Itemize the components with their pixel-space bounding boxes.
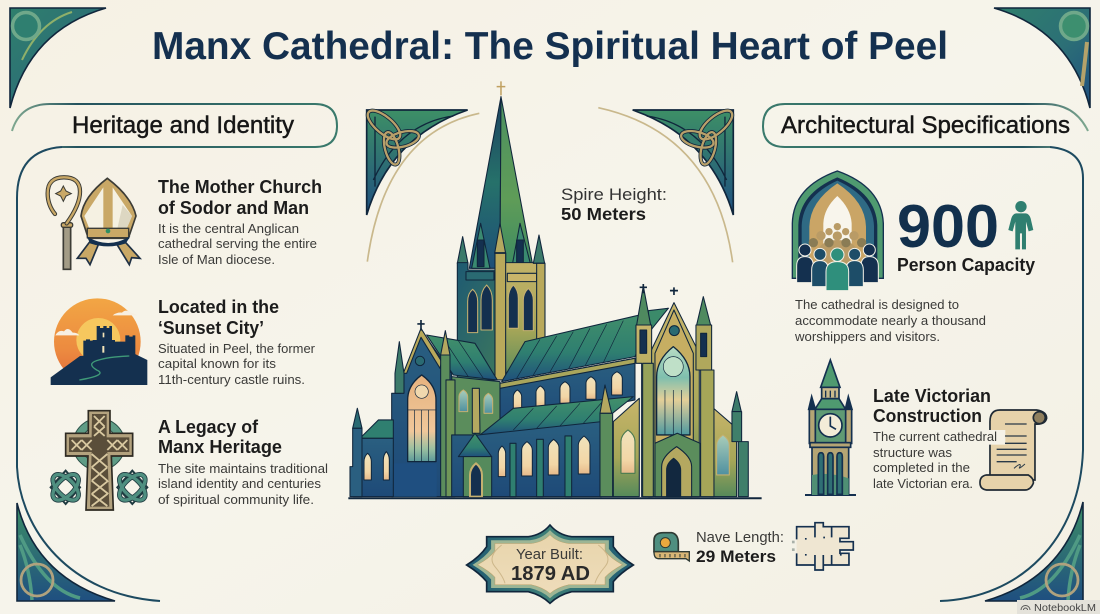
icon: floor plan: [792, 523, 853, 570]
icon: crozier and mitre: [48, 177, 140, 269]
text block: capacity description: [794, 298, 986, 344]
badge: year built: 1879 AD: [511, 563, 590, 585]
arc: right frame: [598, 108, 733, 262]
icon: person: [1008, 201, 1033, 249]
cathedral frame ornaments: [363, 106, 737, 262]
corner ornament: bottom right: [985, 502, 1083, 601]
text block: mother church: Isle of Man diocese.: [158, 253, 275, 267]
text block: mother church: It is the central Anglican: [158, 222, 299, 236]
text block: victorian construction: Construction: [873, 406, 982, 426]
icon: sunset castle: [51, 298, 147, 385]
text block: manx heritage: The site maintains traditional: [158, 462, 328, 476]
text block: capacity description: worshippers and visitors.: [794, 330, 940, 344]
watermark: NotebookLM: NotebookLM: [1034, 602, 1096, 614]
statistic: 900 capacity: Person Capacity: [897, 255, 1035, 275]
panel: architectural specifications: [763, 104, 1088, 601]
text block: manx heritage: A Legacy of: [158, 417, 259, 437]
left transept: [392, 320, 500, 497]
text block: manx heritage: Manx Heritage: [158, 437, 282, 457]
icon: scroll document: [980, 410, 1047, 490]
text block: sunset city: Situated in Peel, the former: [158, 342, 315, 356]
icon: arch with congregation: [792, 171, 883, 291]
text block: manx heritage: island identity and centuries: [158, 477, 321, 491]
badge: year built: Year Built:: [516, 546, 583, 563]
nave roof: [502, 308, 668, 382]
corner ornament: top left: [10, 8, 106, 108]
corner ornament: bottom left: [17, 503, 115, 601]
text block: sunset city: ‘Sunset City’: [158, 318, 264, 338]
icon: clock tower: [805, 360, 856, 495]
badge: year built: [467, 525, 633, 603]
far left chapel: [350, 408, 393, 497]
text block: sunset city: [158, 297, 315, 387]
text block: sunset city: 11th-century castle ruins.: [158, 373, 305, 387]
text block: mother church: of Sodor and Man: [158, 198, 309, 218]
text block: manx heritage: of spiritual community life.: [158, 493, 314, 507]
text block: victorian construction: [873, 386, 997, 491]
label: nave length: Nave Length:: [696, 529, 784, 546]
statistic: 900 capacity: 900: [897, 193, 999, 260]
icon: tape measure: [654, 533, 689, 561]
text block: victorian construction: late Victorian era.: [873, 477, 973, 491]
label: spire height: 50 Meters: [561, 204, 646, 224]
title: Manx Cathedral: The Spiritual Heart of Peel: [152, 25, 948, 68]
corner ornament: top right: [994, 8, 1090, 108]
clerestory wall: [500, 358, 635, 427]
heading: heritage and identity: Heritage and Identity: [72, 112, 294, 139]
text block: mother church: cathedral serving the entire: [158, 237, 317, 251]
text block: sunset city: Located in the: [158, 297, 279, 317]
watermark: NotebookLM: [1017, 600, 1100, 614]
label: spire height: Spire Height:: [561, 185, 667, 204]
label: nave length: 29 Meters: [696, 547, 776, 566]
text block: victorian construction: Late Victorian: [873, 386, 991, 406]
ground line: [348, 495, 762, 501]
icon: celtic cross: [48, 411, 150, 510]
panel: heritage and identity: [12, 104, 337, 601]
heading: architectural specifications: Architectural Specifications: [781, 112, 1070, 139]
aisle: [452, 397, 633, 497]
text block: victorian construction: completed in the: [873, 461, 970, 475]
spire: [457, 97, 545, 268]
ornament: centre left: [363, 106, 468, 215]
statistic: 900 capacity: [897, 193, 1035, 275]
label: spire height: [561, 185, 667, 224]
ornament: centre right: [633, 106, 737, 215]
text block: manx heritage: [158, 417, 328, 507]
text block: mother church: [158, 177, 322, 267]
illustration: cathedral: [348, 81, 762, 498]
text block: capacity description: accommodate nearly a thousand: [795, 314, 986, 328]
cross on spire: [497, 81, 505, 95]
text block: victorian construction: structure was: [873, 446, 952, 460]
right transept: [600, 284, 748, 497]
text block: mother church: The Mother Church: [158, 177, 322, 197]
tower: [457, 253, 545, 380]
text block: victorian construction: The current cathedral: [873, 430, 997, 444]
text block: capacity description: The cathedral is designed to: [795, 298, 959, 312]
label: nave length: [696, 529, 784, 566]
text block: sunset city: capital known for its: [158, 357, 276, 371]
left roof: [427, 335, 497, 380]
arc: left frame: [367, 113, 479, 262]
